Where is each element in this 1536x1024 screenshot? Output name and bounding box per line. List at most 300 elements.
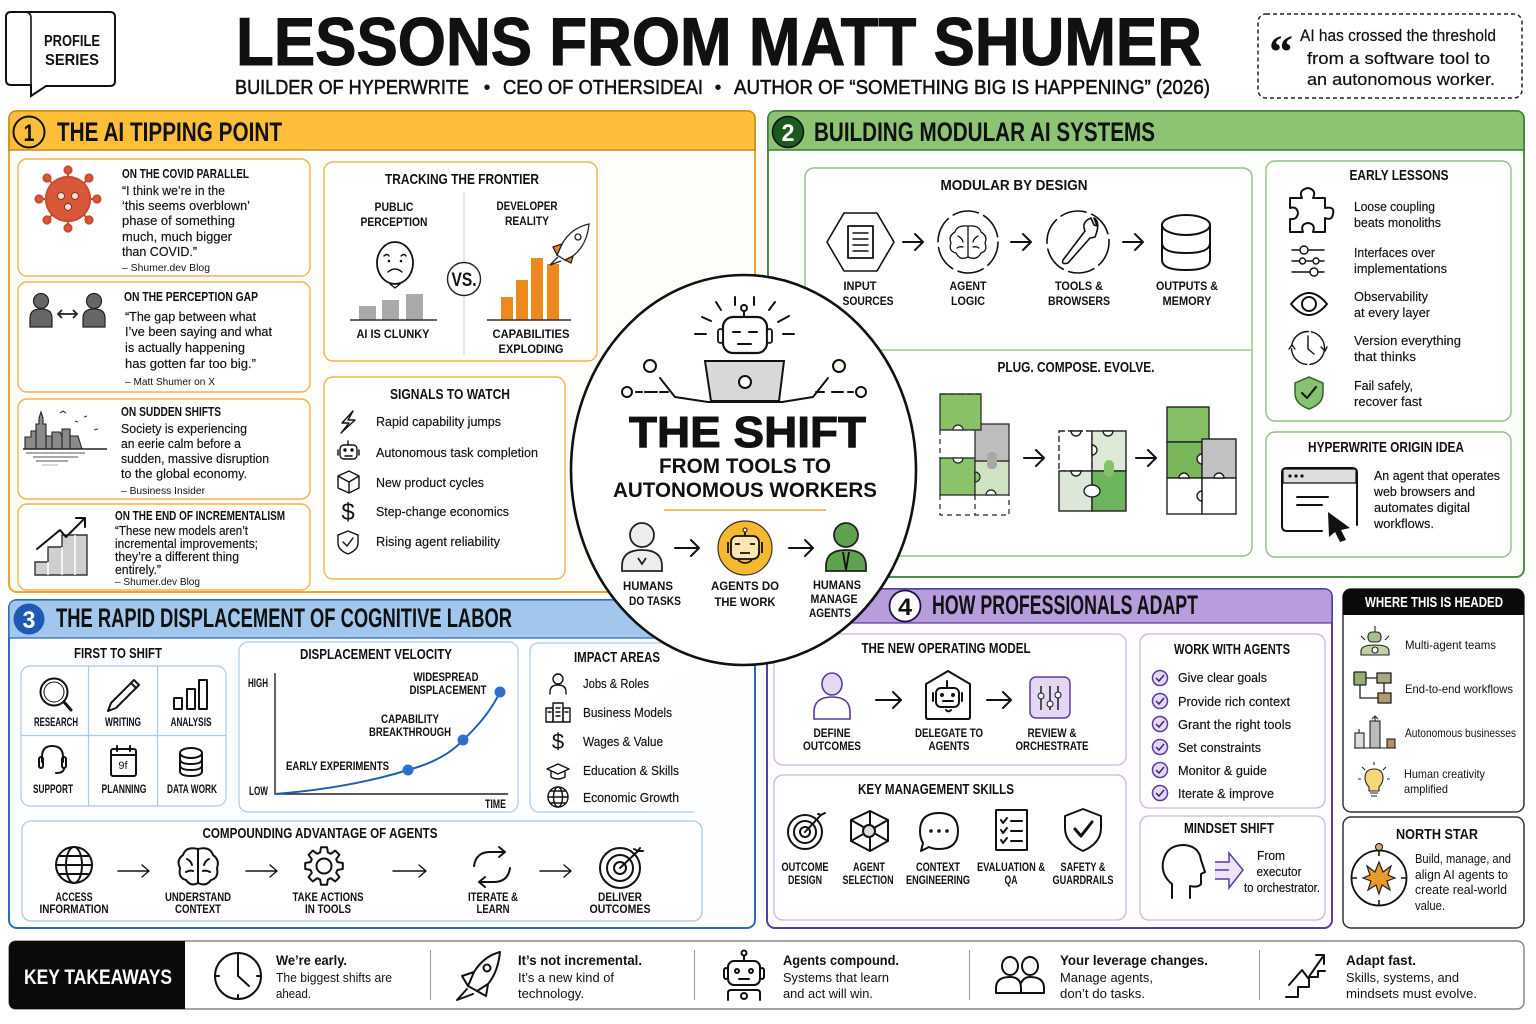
public perception: PUBLIC xyxy=(374,200,414,214)
takeaway 3: and act will win. xyxy=(783,986,873,1001)
takeaway 1: We’re early. xyxy=(276,952,347,968)
quote text: incrementalism: they’re a different thing xyxy=(115,549,239,564)
arrow c xyxy=(393,865,426,877)
takeaway 2: It’s a new kind of xyxy=(518,970,614,985)
labels: first to shift xyxy=(33,715,217,796)
takeaway 5: Skills, systems, and xyxy=(1346,970,1459,985)
panel: rapid displacement xyxy=(9,600,755,928)
chart: displacement velocity: CAPABILITY xyxy=(381,712,439,726)
takeaway 2: technology. xyxy=(518,986,584,1001)
labels: modular flow xyxy=(842,279,1218,308)
icon: pencil xyxy=(108,680,139,711)
subtitle xyxy=(235,77,1210,99)
chart: displacement velocity: HIGH xyxy=(248,676,268,690)
checklist: work with agents: Provide rich context xyxy=(1178,694,1290,709)
quote text: sudden: – Business Insider xyxy=(121,485,205,497)
text: north star xyxy=(1415,852,1511,913)
heading 3: THE RAPID DISPLACEMENT OF COGNITIVE LABOR xyxy=(56,603,512,633)
divider with VS: VS. xyxy=(452,270,476,291)
card: sudden shifts xyxy=(18,399,310,499)
public perception: PERCEPTION xyxy=(360,215,428,229)
panel: where this is headed xyxy=(1343,589,1524,812)
icon: outcome target xyxy=(788,813,825,849)
labels: skills xyxy=(782,860,1114,887)
icon: shield check xyxy=(1295,377,1323,409)
labels: skills: SAFETY & xyxy=(1060,860,1106,874)
labels: skills: DESIGN xyxy=(788,873,822,887)
icon: database xyxy=(1162,215,1210,270)
labels: modular flow: SOURCES xyxy=(842,294,894,308)
panel: the AI tipping point xyxy=(9,111,755,592)
card: signals to watch xyxy=(324,377,565,579)
card: early lessons: EARLY LESSONS xyxy=(1350,167,1448,184)
header band 3 xyxy=(9,600,755,638)
icon: double arrow xyxy=(1215,853,1243,888)
list: signals: Rising agent reliability xyxy=(376,534,500,549)
panel: key takeaways xyxy=(9,941,1524,1009)
arrow op 2 xyxy=(987,692,1011,708)
card: first to shift: FIRST TO SHIFT xyxy=(74,645,162,662)
icon: two people xyxy=(30,294,105,327)
list: impact areas: Wages & Value xyxy=(583,734,663,749)
list: lessons xyxy=(1354,199,1461,409)
icon: robot small xyxy=(338,441,359,459)
labels: compounding: INFORMATION xyxy=(40,902,108,916)
list: impact areas: Education & Skills xyxy=(583,763,679,778)
labels: compounding: TAKE ACTIONS xyxy=(292,890,364,904)
card: perception gap xyxy=(18,282,310,392)
list: lessons: Observability xyxy=(1354,289,1428,304)
text: origin idea: workflows. xyxy=(1373,516,1434,531)
card: modular by design: MODULAR BY DESIGN xyxy=(940,177,1088,194)
takeaway 1: The biggest shifts are xyxy=(276,970,392,985)
callout: quote: from a software tool to xyxy=(1307,49,1490,68)
checklist: work with agents xyxy=(1152,670,1291,801)
icon: gear xyxy=(305,847,343,885)
badge: profile series: PROFILE xyxy=(44,33,100,50)
labels: operating model: REVIEW & xyxy=(1028,726,1077,740)
developer reality: CAPABILITIES xyxy=(492,327,570,341)
card: compounding advantage: COMPOUNDING ADVANTAGE OF AGENTS xyxy=(202,825,438,842)
list: signals: Autonomous task completion xyxy=(376,445,538,460)
icon: calendar: 9f xyxy=(118,760,129,772)
checklist: work with agents: Give clear goals xyxy=(1178,670,1267,685)
card: impact areas xyxy=(530,643,720,812)
labels: skills: OUTCOME xyxy=(782,860,828,874)
icon: human manager xyxy=(826,523,866,571)
quote text: sudden: ON SUDDEN SHIFTS xyxy=(121,404,221,419)
quote text: sudden xyxy=(121,404,269,497)
icon: people xyxy=(996,957,1044,993)
labels: compounding: ITERATE & xyxy=(468,890,518,904)
quote text: sudden: Society is experiencing xyxy=(121,421,247,436)
heading 2: BUILDING MODULAR AI SYSTEMS xyxy=(814,117,1155,147)
quote text: gap: – Matt Shumer on X xyxy=(125,376,215,388)
labels: compounding xyxy=(40,890,650,916)
quote text: covid: – Shumer.dev Blog xyxy=(122,262,210,274)
arrow op 1 xyxy=(876,692,901,708)
public perception: AI IS CLUNKY xyxy=(356,327,430,341)
developer reality xyxy=(487,199,589,356)
takeaway 2 xyxy=(518,952,642,1001)
icon: compass xyxy=(1352,844,1406,906)
number 1: 1 xyxy=(24,120,34,147)
icon: globe xyxy=(548,787,568,807)
icon: growth stairs xyxy=(1286,955,1325,997)
list: impact areas: Economic Growth xyxy=(583,790,679,805)
quote text: incrementalism xyxy=(115,508,285,588)
quote text: gap xyxy=(124,289,272,388)
quote text: sudden: an eerie calm before a xyxy=(121,436,242,451)
icon: rocket xyxy=(550,224,589,265)
takeaway 3: Systems that learn xyxy=(783,970,889,985)
labels: operating model: OUTCOMES xyxy=(803,739,861,753)
card: early lessons xyxy=(1266,161,1511,421)
number 3 xyxy=(14,604,44,634)
takeaway 2: It’s not incremental. xyxy=(518,952,642,968)
icon: multi-agent xyxy=(1361,626,1389,655)
subheading: from tools xyxy=(613,455,877,502)
labels: modular flow: INPUT xyxy=(844,279,877,293)
icon: agent gold xyxy=(718,521,772,575)
icon: magnifier xyxy=(40,678,71,710)
icon: agent network xyxy=(851,811,888,851)
icon: robot with laptop xyxy=(622,297,866,402)
arrow 5 xyxy=(1136,450,1156,466)
icon: person purple xyxy=(814,673,850,719)
labels: shift flow: AGENTS xyxy=(809,606,851,620)
public perception xyxy=(350,200,437,341)
icon: tools xyxy=(1047,211,1109,273)
header band 4 xyxy=(767,589,1332,623)
labels: compounding: DELIVER xyxy=(598,890,642,904)
text: origin idea: web browsers and xyxy=(1373,484,1475,499)
icon: mixer xyxy=(1030,677,1070,718)
arrow shift 1 xyxy=(675,540,699,556)
labels: first to shift: RESEARCH xyxy=(34,715,78,729)
labels: skills: EVALUATION & xyxy=(977,860,1045,874)
list: where headed: amplified xyxy=(1404,782,1448,796)
card: first to shift xyxy=(21,645,226,806)
arrow a xyxy=(118,865,149,877)
panel: how professionals adapt xyxy=(767,589,1332,928)
list: signals: Rapid capability jumps xyxy=(376,414,501,429)
labels: modular flow: OUTPUTS & xyxy=(1156,279,1218,293)
checklist: work with agents: Monitor & guide xyxy=(1178,763,1267,778)
icon: lightbulb xyxy=(1358,762,1390,796)
badge: profile series: SERIES xyxy=(45,52,99,69)
card: mindset shift xyxy=(1140,816,1325,920)
chart: displacement velocity: WIDESPREAD xyxy=(414,670,479,684)
quote text: covid: than COVID.” xyxy=(122,244,197,259)
icon: head xyxy=(1163,845,1205,898)
labels: skills: SELECTION xyxy=(842,873,894,887)
arrow d xyxy=(540,865,571,877)
card: new operating model xyxy=(774,634,1126,765)
quote text: covid: phase of something xyxy=(122,213,235,228)
icon: rocket xyxy=(457,952,500,1000)
list: signals: Step-change economics xyxy=(376,504,509,519)
list: where headed: Human creativity xyxy=(1404,767,1485,781)
icon: shield xyxy=(1065,809,1101,851)
quote text: sudden: sudden, massive disruption xyxy=(121,451,269,466)
icon: robot xyxy=(724,950,764,1000)
subtitle: BUILDER OF HYPERWRITE xyxy=(235,77,469,99)
labels: skills: ENGINEERING xyxy=(906,873,970,887)
quote text: incrementalism: ON THE END OF INCREMENTALISM xyxy=(115,508,285,523)
labels: skills: AGENT xyxy=(853,860,886,874)
card: key management skills xyxy=(774,775,1126,920)
list: signals: New product cycles xyxy=(376,475,484,490)
icon: box xyxy=(338,471,359,493)
list: impact areas xyxy=(583,676,679,805)
quote text: covid: ON THE COVID PARALLEL xyxy=(122,166,249,181)
puzzle: assembled xyxy=(1167,407,1236,514)
labels: modular flow: MEMORY xyxy=(1162,294,1212,308)
chart: displacement velocity: LOW xyxy=(249,784,268,798)
icon: input sources xyxy=(827,213,894,271)
labels: skills: GUARDRAILS xyxy=(1052,873,1114,887)
header: where headed xyxy=(1343,589,1524,615)
text: north star: create real-world xyxy=(1415,883,1507,897)
list: where headed xyxy=(1404,638,1516,796)
circle: the shift xyxy=(571,275,916,665)
quote text: incrementalism: incremental improvements; xyxy=(115,536,258,551)
checklist: work with agents: Iterate & improve xyxy=(1178,786,1274,801)
text: origin idea xyxy=(1373,468,1500,531)
quote text: covid: ‘this seems overblown’ xyxy=(122,198,250,213)
arrow 3 xyxy=(1123,234,1143,250)
text: origin idea: An agent that operates xyxy=(1374,468,1500,483)
text: north star: align AI agents to xyxy=(1415,868,1508,882)
icon: clock xyxy=(215,953,261,999)
icon: checklist xyxy=(996,810,1027,850)
icon: robot in house xyxy=(926,671,970,719)
quote text: covid xyxy=(122,166,250,274)
label: key takeaways xyxy=(9,941,185,1009)
quote text: gap: ON THE PERCEPTION GAP xyxy=(124,289,258,304)
takeaway 5: mindsets must evolve. xyxy=(1346,986,1477,1001)
labels: skills: QA xyxy=(1004,873,1018,887)
developer reality: DEVELOPER xyxy=(496,199,558,213)
icon: humans do tasks xyxy=(622,523,662,571)
card: end of incrementalism xyxy=(18,504,310,590)
developer reality: REALITY xyxy=(505,214,549,228)
icon: bolt xyxy=(341,411,355,433)
icon: browser with cursor xyxy=(1282,468,1357,542)
list: lessons: implementations xyxy=(1354,261,1447,276)
chart: displacement velocity: BREAKTHROUGH xyxy=(369,725,451,739)
arrow shift 2 xyxy=(789,540,813,556)
puzzle: separated pieces xyxy=(940,394,1009,515)
text: from executor: executor xyxy=(1256,864,1302,879)
icon: buildings xyxy=(546,703,570,722)
labels: operating model: DEFINE xyxy=(814,726,850,740)
quote text: incrementalism: “These new models aren’t xyxy=(115,523,248,538)
icon: globe xyxy=(56,847,92,883)
labels: operating model: ORCHESTRATE xyxy=(1016,739,1088,753)
subtitle: • xyxy=(714,77,722,99)
icon: bars xyxy=(174,680,207,709)
labels: compounding: CONTEXT xyxy=(175,902,222,916)
card: work with agents: WORK WITH AGENTS xyxy=(1174,641,1290,658)
subheading: from tools: FROM TOOLS TO xyxy=(659,455,831,478)
labels: modular flow: TOOLS & xyxy=(1055,279,1103,293)
checklist: work with agents: Grant the right tools xyxy=(1178,717,1291,732)
callout: quote xyxy=(1258,14,1522,98)
list: lessons: Fail safely, xyxy=(1354,378,1413,393)
icon: shield xyxy=(338,531,358,554)
icon: dollar: $ xyxy=(341,499,355,526)
list: lessons: at every layer xyxy=(1354,305,1431,320)
text: from executor xyxy=(1244,848,1320,895)
labels: shift flow: HUMANS xyxy=(623,579,673,593)
labels: compounding: ACCESS xyxy=(56,890,92,904)
card: key management skills: KEY MANAGEMENT SKILLS xyxy=(858,781,1014,798)
chart: displacement velocity xyxy=(239,642,518,812)
icon: stairs and arrow xyxy=(35,518,87,575)
icon: workflow xyxy=(1354,672,1391,703)
number 3: 3 xyxy=(22,607,36,634)
takeaway 5: Adapt fast. xyxy=(1346,952,1416,968)
icon: chat xyxy=(920,813,958,851)
labels: modular flow: LOGIC xyxy=(951,294,985,308)
icon: graduation cap xyxy=(547,764,569,779)
card: work with agents xyxy=(1140,634,1325,808)
labels: shift flow: MANAGE xyxy=(810,592,858,606)
heading 1: THE AI TIPPING POINT xyxy=(57,117,282,147)
labels: first to shift: PLANNING xyxy=(102,782,146,796)
text: origin idea: automates digital xyxy=(1374,500,1470,515)
quote text: gap: is actually happening xyxy=(125,340,245,355)
icon: puzzle piece xyxy=(1290,188,1333,232)
list: impact areas: Jobs & Roles xyxy=(583,676,649,691)
subtitle: • xyxy=(483,77,491,99)
text: from executor: From xyxy=(1257,848,1285,863)
quote text: gap: “The gap between what xyxy=(125,309,256,324)
card: signals to watch: SIGNALS TO WATCH xyxy=(390,386,510,403)
number 4: 4 xyxy=(898,594,913,621)
quote text: covid: much, much bigger xyxy=(122,229,233,244)
quote text: sudden: to the global economy. xyxy=(121,466,247,481)
icon: city xyxy=(1354,716,1396,748)
list: lessons: Version everything xyxy=(1354,333,1461,348)
labels: operating model: DELEGATE TO xyxy=(915,726,983,740)
list: lessons: Interfaces over xyxy=(1354,245,1436,260)
divider with VS xyxy=(448,192,480,355)
developer reality: EXPLODING xyxy=(498,342,564,356)
icon: iterate xyxy=(474,847,510,887)
icon: sliders xyxy=(1292,246,1324,276)
labels: shift flow xyxy=(623,578,861,620)
header band 2 xyxy=(768,111,1524,150)
quote text: gap: has gotten far too big.” xyxy=(125,356,256,371)
subtitle: CEO OF OTHERSIDEAI xyxy=(503,77,703,99)
icon: agent logic xyxy=(938,211,998,273)
list: signals xyxy=(376,414,538,549)
number 2: 2 xyxy=(782,120,794,147)
number 2 xyxy=(772,116,804,148)
icon: headset xyxy=(39,746,66,773)
labels: compounding: OUTCOMES xyxy=(590,902,650,916)
panel: building modular AI systems xyxy=(768,111,1524,577)
text: north star: Build, manage, and xyxy=(1415,852,1511,866)
card: mindset shift: MINDSET SHIFT xyxy=(1184,820,1274,837)
quote text: gap: I’ve been saying and what xyxy=(125,324,272,339)
card: tracking the frontier: TRACKING THE FRONTIER xyxy=(385,171,539,188)
callout: quote: AI has crossed the threshold xyxy=(1300,26,1496,45)
labels: shift flow: THE WORK xyxy=(714,595,776,609)
labels: first to shift: SUPPORT xyxy=(33,782,73,796)
callout: quote: an autonomous worker. xyxy=(1307,70,1495,89)
card: covid parallel xyxy=(18,159,310,276)
text: north star: value. xyxy=(1415,899,1445,913)
card: new operating model: THE NEW OPERATING MODEL xyxy=(862,640,1030,657)
card: modular by design xyxy=(805,168,1252,556)
icon: data work xyxy=(180,748,202,776)
takeaway 4 xyxy=(1060,952,1208,1001)
labels: operating model: AGENTS xyxy=(928,739,970,753)
quote text: covid: “I think we’re in the xyxy=(122,183,225,198)
subheading: from tools: AUTONOMOUS WORKERS xyxy=(613,479,877,502)
takeaway 3 xyxy=(783,952,899,1001)
icon: virus xyxy=(36,166,100,232)
chart: displacement velocity: EARLY EXPERIMENTS xyxy=(286,759,389,773)
labels: shift flow: DO TASKS xyxy=(629,594,681,608)
callout: quote: “ xyxy=(1269,26,1293,79)
chart: displacement velocity: DISPLACEMENT VELOCITY xyxy=(300,646,452,663)
takeaway 4: Your leverage changes. xyxy=(1060,952,1208,968)
title: LESSONS FROM MATT SHUMER xyxy=(236,4,1202,80)
number 1 xyxy=(14,116,44,148)
card: compounding advantage xyxy=(22,821,702,921)
number 4 xyxy=(890,590,920,622)
list: lessons: beats monoliths xyxy=(1354,215,1441,230)
checklist: work with agents: Set constraints xyxy=(1178,740,1261,755)
arrow 4 xyxy=(1024,450,1044,466)
takeaway 4: don’t do tasks. xyxy=(1060,986,1145,1001)
icon: calendar xyxy=(111,746,136,776)
quote text: incrementalism: entirely.” xyxy=(115,562,161,577)
arrow 1 xyxy=(903,234,923,250)
labels: compounding: LEARN xyxy=(476,902,510,916)
list: where headed: Autonomous businesses xyxy=(1405,726,1516,740)
takeaway 3: Agents compound. xyxy=(783,952,899,968)
card: hyperwrite origin idea: HYPERWRITE ORIGIN IDEA xyxy=(1308,439,1464,456)
labels: operating model xyxy=(803,726,1088,753)
arrow b xyxy=(246,865,277,877)
subtitle: AUTHOR OF “SOMETHING BIG IS HAPPENING” (2026) xyxy=(734,77,1210,99)
quote text: incrementalism: – Shumer.dev Blog xyxy=(115,576,200,588)
list: lessons: that thinks xyxy=(1354,349,1417,364)
icon: clock cycle xyxy=(1289,332,1327,364)
list: lessons: Loose coupling xyxy=(1354,199,1435,214)
panel: north star: NORTH STAR xyxy=(1396,826,1478,843)
chart: displacement velocity: DISPLACEMENT xyxy=(410,683,487,697)
icon: skyline xyxy=(23,411,107,465)
icon: dollar: $ xyxy=(552,729,564,754)
heading: the shift: THE SHIFT xyxy=(629,408,866,457)
card: tracking the frontier xyxy=(324,162,597,361)
labels: first to shift: DATA WORK xyxy=(167,782,217,796)
labels: modular flow: BROWSERS xyxy=(1048,294,1110,308)
labels: shift flow: AGENTS DO xyxy=(711,579,779,593)
takeaway 5 xyxy=(1346,952,1477,1001)
text: from executor: to orchestrator. xyxy=(1244,880,1320,895)
labels: shift flow: HUMANS xyxy=(813,578,861,592)
list: lessons: recover fast xyxy=(1354,394,1422,409)
card: impact areas: IMPACT AREAS xyxy=(574,649,660,666)
